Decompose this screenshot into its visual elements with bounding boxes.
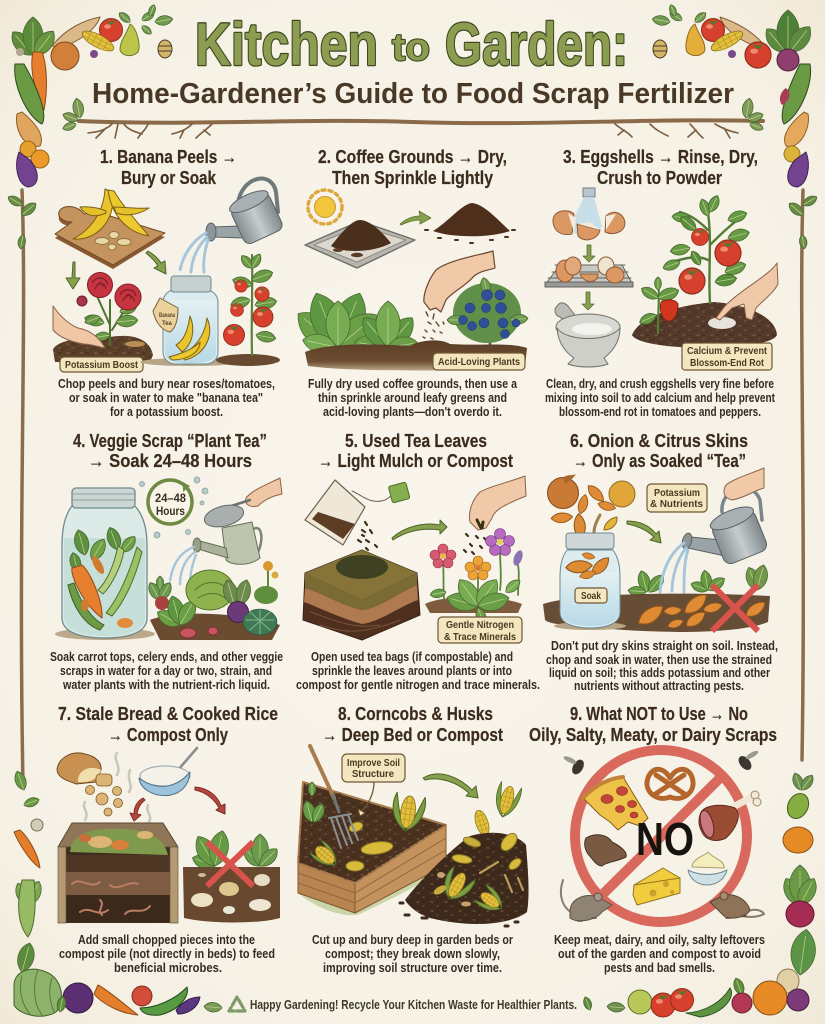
heading 6 xyxy=(570,431,748,471)
heading 9 xyxy=(529,704,777,745)
body text 3: Clean, dry, and crush eggshells very fine before xyxy=(546,377,774,391)
garden fork xyxy=(310,746,358,848)
heading 8 xyxy=(322,704,503,745)
jar of banana tea xyxy=(140,276,240,366)
heading 7: 7. Stale Bread & Cooked Rice xyxy=(58,704,278,724)
soil and roses xyxy=(53,272,153,362)
red x: not directly in beds xyxy=(207,842,253,886)
right rat xyxy=(710,892,764,918)
timer: 24-48 hours: Hours xyxy=(156,504,185,518)
heading 6: 6. Onion & Citrus Skins xyxy=(570,431,748,451)
drying tray with grounds xyxy=(305,220,415,268)
heading 4 xyxy=(73,431,267,471)
heading 4: 4. Veggie Scrap “Plant Tea” xyxy=(73,431,267,451)
compost block xyxy=(303,550,420,640)
label: improve soil structure: Improve Soil xyxy=(347,757,400,769)
hand with strainer xyxy=(202,478,282,531)
label: improve soil structure xyxy=(342,754,405,816)
heading 6: → Only as Soaked “Tea” xyxy=(573,451,746,471)
greasy scraps xyxy=(585,835,626,866)
hand with eggshell powder xyxy=(708,263,778,329)
water stream xyxy=(660,543,688,592)
body text 9: Keep meat, dairy, and oily, salty leftovers xyxy=(554,933,765,947)
drying rack with shells xyxy=(545,257,633,287)
border: bottom-right vegetables xyxy=(582,969,809,1017)
timer: 24-48 hours: 24–48 xyxy=(155,491,186,505)
panel 9: what not to use xyxy=(529,704,777,975)
heading 2: Then Sprinkle Lightly xyxy=(332,168,493,188)
body text 2: Fully dry used coffee grounds, then use a xyxy=(308,377,518,391)
body text 4 xyxy=(50,650,283,692)
title: Garden: xyxy=(445,11,628,78)
panel 7: stale bread and rice xyxy=(57,704,281,975)
body text 4: scraps in water for a day or two, strain, and xyxy=(60,664,272,678)
label: calcium and blossom-end rot: Blossom-End Rot xyxy=(690,357,764,369)
heading 9: Oily, Salty, Meaty, or Dairy Scraps xyxy=(529,725,777,745)
hand holding watering can xyxy=(681,468,769,566)
body text 5 xyxy=(296,650,540,692)
steam xyxy=(84,753,150,822)
border: right lower vegetables xyxy=(779,771,821,977)
arrow: bed to compost xyxy=(423,774,478,798)
arrow: bag to flowers xyxy=(392,520,447,540)
panel 2: coffee grounds xyxy=(289,147,528,419)
arrow: scraps to compost xyxy=(130,798,145,821)
icon: recycle leaf xyxy=(229,997,245,1011)
compost pile with corn xyxy=(400,830,529,926)
water stream xyxy=(170,547,196,584)
bread and crumbs xyxy=(57,753,122,816)
border: top-left produce cluster xyxy=(7,4,174,187)
arrow: board to roses xyxy=(66,262,80,289)
branch divider xyxy=(62,97,764,138)
body text 9: out of the garden and compost to avoid xyxy=(558,947,761,961)
soil strip xyxy=(305,340,527,370)
heading 1: 1. Banana Peels → xyxy=(100,147,237,167)
heading 2: 2. Coffee Grounds → Dry, xyxy=(318,147,507,167)
body text 4: water plants with the nutrient-rich liquid. xyxy=(62,678,270,692)
body text 3: blossom-end rot in tomatoes and peppers. xyxy=(559,405,761,419)
rinsed eggshells xyxy=(553,211,625,240)
border: left vine xyxy=(21,190,24,785)
water stream xyxy=(180,233,208,272)
border: right vine xyxy=(802,190,803,760)
body text 8: Cut up and bury deep in garden beds or xyxy=(312,933,513,947)
label: soak xyxy=(575,588,607,603)
watering can xyxy=(206,179,284,246)
faucet and rinsing water xyxy=(570,188,602,236)
panel 4: veggie scrap tea xyxy=(50,431,283,692)
label: acid-loving plants: Acid-Loving Plants xyxy=(438,356,520,368)
body text 6: Don't put dry skins straight on soil. Instead, xyxy=(551,639,778,653)
body text 6: nutrients without attracting pests. xyxy=(574,679,744,693)
mortar and pestle xyxy=(555,303,620,367)
red x: do not apply dry xyxy=(712,585,758,631)
heading 3 xyxy=(563,147,758,188)
border: bottom-left vegetables xyxy=(56,983,222,1015)
tomato plant with soil xyxy=(632,194,777,348)
subtitle: Home-Gardener’s Guide to Food Scrap Fertilizer xyxy=(92,78,734,110)
label: gentle nitrogen xyxy=(438,617,522,643)
heading 4: → Soak 24–48 Hours xyxy=(88,451,252,471)
flies xyxy=(563,749,759,776)
label: potassium and nutrients: & Nutrients xyxy=(650,498,703,510)
body text 3 xyxy=(545,377,776,419)
hand sprinkling tea xyxy=(464,476,526,554)
label: potassium boost: Potassium Boost xyxy=(65,359,138,371)
panel 6: onion and citrus skins xyxy=(543,431,778,693)
bubbles xyxy=(140,477,208,538)
arrow: board to jar xyxy=(146,251,166,274)
heading 8: → Deep Bed or Compost xyxy=(322,725,503,745)
raised bed with corn xyxy=(298,782,446,915)
body text 1 xyxy=(58,377,275,419)
body text 8 xyxy=(312,933,513,975)
label: calcium and blossom-end rot xyxy=(682,343,772,370)
plants in bed with buried scraps xyxy=(183,829,281,922)
body text 1: for a potassium boost. xyxy=(110,405,223,419)
body text 6: liquid on soil; this adds potassium and other xyxy=(549,666,770,680)
label: acid-loving plants xyxy=(433,353,525,370)
body text 8: improving soil structure over time. xyxy=(323,961,502,975)
heading 5: 5. Used Tea Leaves xyxy=(345,431,487,451)
label: gentle nitrogen: & Trace Minerals xyxy=(444,631,516,643)
body text 5: Open used tea bags (if compostable) and xyxy=(311,650,513,664)
label: gentle nitrogen: Gentle Nitrogen xyxy=(446,619,514,631)
heading 5 xyxy=(318,431,513,471)
arrow: scraps away from beds xyxy=(195,787,225,814)
NO text: NO xyxy=(636,813,694,865)
title xyxy=(195,11,628,78)
panel 1: banana peels xyxy=(53,147,284,419)
tea bag with tag xyxy=(305,480,410,545)
pizza slice xyxy=(583,777,648,830)
heading 1: Bury or Soak xyxy=(121,168,217,188)
prohibition sign xyxy=(575,750,747,922)
body text 7: compost pile (not directly in beds) to feed xyxy=(59,947,275,961)
heading 8: 8. Corncobs & Husks xyxy=(338,704,493,724)
heading 9: 9. What NOT to Use → No xyxy=(570,704,748,724)
heading 7 xyxy=(58,704,278,745)
body text 3: mixing into soil to add calcium and help prevent xyxy=(545,391,776,405)
hand sprinkling xyxy=(423,251,495,339)
arrow: skins to soil xyxy=(627,521,661,543)
body text 9 xyxy=(554,933,765,975)
body text 9: pests and bad smells. xyxy=(604,961,715,975)
body text 5: compost for gentle nitrogen and trace minerals. xyxy=(296,678,540,692)
body text 1: or soak in water to make "banana tea" xyxy=(69,391,263,405)
panel 5: used tea leaves xyxy=(296,431,540,692)
onion and citrus with skins xyxy=(548,474,635,539)
panel 3: eggshells xyxy=(545,147,778,419)
body text 2: thin sprinkle around leafy greens and xyxy=(318,391,507,405)
falling tea leaves xyxy=(358,522,377,550)
body text 6 xyxy=(546,639,778,693)
heading 5: → Light Mulch or Compost xyxy=(318,451,513,471)
cutting board with banana peels xyxy=(55,189,165,269)
hand burying peels xyxy=(53,306,105,348)
jar of banana tea: Tea xyxy=(162,321,173,327)
icon: sun xyxy=(308,190,342,224)
footer text: Happy Gardening! Recycle Your Kitchen Waste for Healthier Plants. xyxy=(250,998,577,1012)
heading 2 xyxy=(318,147,507,188)
tomato plant xyxy=(216,252,280,366)
flowers in soil xyxy=(425,528,524,627)
body text 2 xyxy=(308,377,518,419)
body text 4: Soak carrot tops, celery ends, and other veggie xyxy=(50,650,283,664)
body text 7 xyxy=(59,933,275,975)
panel 8: corncobs and husks xyxy=(298,704,529,975)
title: Kitchen xyxy=(195,11,378,78)
compost bin with worms xyxy=(58,823,178,923)
vegetable garden bed xyxy=(145,561,280,640)
ham leg xyxy=(698,791,761,840)
arrow: dry to pile xyxy=(400,211,431,225)
bowl of mayo xyxy=(688,852,727,885)
border: right upper leaves xyxy=(786,193,819,249)
title: to xyxy=(392,27,430,69)
body text 5: sprinkle the leaves around plants or into xyxy=(312,664,512,678)
cheese wedge xyxy=(633,868,680,905)
border: top-right produce cluster xyxy=(651,4,816,187)
heading 7: → Compost Only xyxy=(108,725,228,745)
jar soaking skins xyxy=(554,533,626,630)
arrow: dry to crush xyxy=(582,292,594,310)
heading 3: 3. Eggshells → Rinse, Dry, xyxy=(563,147,758,167)
body text 6: chop and soak in water, then use the strained xyxy=(546,653,772,667)
body text 2: acid-loving plants—don't overdo it. xyxy=(323,405,502,419)
label: potassium and nutrients xyxy=(647,484,707,512)
blueberry bush xyxy=(447,276,528,345)
border: left lower vegetables xyxy=(12,769,61,1016)
timer: 24-48 hours xyxy=(148,480,192,524)
jar of banana tea: Banana xyxy=(159,313,175,319)
leafy greens xyxy=(289,288,420,357)
body text 7: Add small chopped pieces into the xyxy=(78,933,255,947)
heading 1 xyxy=(100,147,237,188)
soil with skins and sprouts xyxy=(543,563,770,632)
body text 7: beneficial microbes. xyxy=(114,961,222,975)
label: potassium boost xyxy=(60,357,143,372)
arrow: rinse to dry xyxy=(583,245,595,262)
label: potassium and nutrients: Potassium xyxy=(654,487,700,499)
body text 1: Chop peels and bury near roses/tomatoes, xyxy=(58,377,275,391)
label: improve soil structure: Structure xyxy=(352,768,394,780)
pepper plant xyxy=(638,277,681,333)
label: soak: Soak xyxy=(581,590,601,602)
rice bowl xyxy=(139,748,197,796)
heading 3: Crush to Powder xyxy=(597,168,722,188)
label: calcium and blossom-end rot: Calcium & Prevent xyxy=(687,345,767,357)
watering can xyxy=(193,522,261,564)
large jar of vegetable scraps xyxy=(55,488,155,640)
border: left upper leaves xyxy=(6,193,39,249)
left rat xyxy=(561,880,612,921)
corn above pile xyxy=(472,781,523,838)
pile of dried grounds xyxy=(425,203,515,243)
body text 8: compost; they break down slowly, xyxy=(325,947,500,961)
pretzel xyxy=(647,769,693,798)
